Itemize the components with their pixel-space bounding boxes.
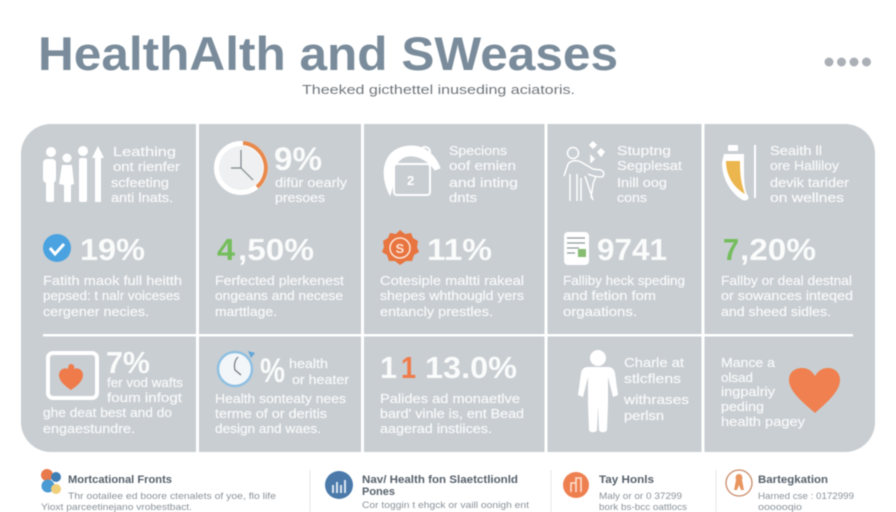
description: Fatith maok full heitth (43, 273, 182, 288)
text: Cor toggin t ehgck or vaill oonigh ent (362, 500, 529, 511)
description: stlcflens (624, 371, 682, 386)
description: ont rienfer (113, 159, 181, 174)
icon: blue clock (218, 351, 255, 386)
stat: 1 (401, 350, 416, 385)
description: health pagey (721, 414, 806, 429)
cell: row 1 column 3 (384, 143, 518, 205)
description (721, 273, 853, 319)
description (43, 273, 182, 319)
icon: bottle (722, 145, 756, 200)
cell: row 1 column 5 (722, 143, 850, 205)
icon: blue chart (325, 471, 353, 499)
title: HealthAlth and SWeases (38, 27, 618, 80)
heading: Pones (362, 486, 395, 498)
cell: row 2 column 5 (721, 232, 853, 319)
cell: row 1 column 1 (43, 144, 181, 205)
stat: ,20% (740, 232, 816, 267)
footer item 2 (325, 471, 529, 511)
text (599, 491, 687, 512)
heading: Nav/ Health fon Slaetctlionld (362, 474, 518, 486)
description: withrases (623, 392, 690, 407)
stat caption: health (289, 356, 328, 371)
cell: row 2 column 4 (563, 232, 685, 319)
description: design and waes. (215, 421, 321, 436)
description (380, 273, 525, 319)
icon: dome with box: 2 (407, 173, 414, 188)
description: Specions (449, 143, 508, 158)
description: fer vod wafts (107, 375, 184, 390)
stat (380, 350, 517, 385)
description (215, 391, 347, 436)
icon: clock (216, 143, 266, 192)
text: Maly or or 0 37299 (599, 491, 682, 502)
menu dots (824, 58, 871, 66)
description: dnts (449, 190, 478, 205)
description: Cotesiple maltti rakeal (380, 273, 524, 288)
stat: ,50% (238, 232, 314, 267)
description: cergener necies. (43, 304, 149, 319)
icon: orange circle (563, 472, 589, 498)
stat: 9741 (597, 232, 667, 267)
description (275, 175, 348, 205)
icon: people with arrow (43, 146, 104, 202)
stat: 9% (274, 141, 322, 177)
stat: 1 (380, 350, 397, 385)
heading: Tay Honls (599, 474, 654, 486)
cell: row 3 column 3 (380, 350, 524, 436)
text (41, 491, 276, 512)
cell: row 3 column 5 (721, 355, 840, 429)
heading: Mortcational Fronts (68, 474, 172, 486)
icon: person (578, 350, 618, 432)
main panel (21, 124, 875, 452)
heading: Bartegkation (758, 474, 828, 486)
description: or sowances inteqed (721, 288, 853, 303)
stat: 11% (427, 232, 492, 267)
description (563, 273, 685, 319)
stat: 19% (80, 232, 145, 267)
description: Fallby or deal destnal (721, 273, 852, 288)
description: Segplesat (617, 158, 682, 173)
description: and sheed sidles. (721, 304, 831, 319)
description: olsad (721, 370, 753, 385)
description (449, 143, 518, 205)
icon: outlined circle (726, 470, 752, 496)
description: Leathing (113, 144, 176, 159)
stat: % (260, 352, 285, 390)
description: aagerad instiices. (380, 421, 492, 436)
description: on wellnes (770, 190, 845, 205)
icon: outlined person with pills (564, 142, 604, 201)
cell: row 1 column 4 (564, 142, 682, 205)
text (758, 491, 854, 512)
description: Stuptng (617, 143, 671, 158)
icon: blue check (43, 234, 71, 262)
description: presoes (275, 190, 326, 205)
text: Harned cse : 0172999 (758, 491, 854, 502)
description: ore Halliloy (770, 158, 840, 173)
description (770, 143, 850, 205)
cell: row 1 column 2 (216, 141, 348, 205)
description: difür oearly (275, 175, 348, 190)
description: pepsed: t nalr voiceses (43, 288, 181, 303)
description: shepes whthougld yers (380, 288, 525, 303)
stat: 7% (106, 345, 150, 380)
description: perlsn (624, 408, 664, 423)
description: marttlage. (215, 304, 277, 319)
description: entancly prestles. (380, 304, 493, 319)
cell: row 2 column 1 (43, 232, 182, 319)
description (111, 144, 181, 205)
description: foum infogt (107, 390, 182, 405)
description (617, 143, 682, 205)
stat: 13.0% (425, 350, 517, 385)
description: Seaith ll (770, 143, 822, 158)
description: scfeeting (111, 175, 169, 190)
description (215, 273, 344, 319)
description (380, 391, 524, 436)
icon: orange badge: S (396, 241, 404, 256)
footer item 1 (41, 469, 276, 512)
description: bard' vinle is, ent Bead (380, 406, 524, 421)
description: and inting (449, 175, 518, 190)
footer item 4 (726, 470, 854, 512)
icon: orange badge (382, 230, 419, 265)
description (43, 375, 184, 436)
icon: coloured circles (41, 469, 61, 494)
description: Charle at (624, 355, 684, 370)
description: and fetion fom (563, 288, 656, 303)
description: Inill oog (617, 175, 667, 190)
description: ingpalriy (721, 384, 776, 399)
description: oof emien (449, 158, 516, 173)
description: ghe deat best and do (43, 405, 172, 420)
cell: row 2 column 3 (380, 230, 525, 319)
subtitle: Theeked gicthettel inuseding aciatoris. (302, 82, 575, 97)
stat: 4 (217, 232, 236, 267)
cell: row 2 column 2 (215, 232, 344, 319)
description: Palides ad monaetlve (380, 391, 520, 406)
icon: heart card (48, 353, 97, 398)
footer dividers (310, 470, 716, 512)
description: Falliby heck speding (563, 273, 685, 288)
cell: row 3 column 2 (215, 351, 350, 436)
description: terme of or deritis (215, 406, 328, 421)
description (623, 355, 690, 423)
description (721, 355, 806, 429)
icon: heart (789, 368, 840, 413)
description: Ferfected plerkenest (215, 273, 344, 288)
description: ongeans and necese (215, 288, 343, 303)
description: devik tarider (770, 175, 850, 190)
description: cons (617, 190, 648, 205)
description: Mance a (721, 355, 776, 370)
footer item 3 (563, 472, 687, 512)
description: anti lnats. (111, 190, 173, 205)
stat: 7 (723, 232, 739, 267)
description: orgaations. (563, 304, 637, 319)
stat caption: or heater (292, 372, 350, 387)
text: Thr ootailee ed boore ctenalets of yoe, flo life (68, 491, 276, 502)
description: engaestundre. (43, 421, 135, 436)
description: Health sonteaty nees (215, 391, 347, 406)
icon: document (564, 232, 589, 265)
description: peding (721, 399, 764, 414)
cell: row 3 column 1 (43, 345, 184, 436)
stat caption (289, 356, 350, 387)
cell: row 3 column 4 (578, 350, 690, 432)
heading (362, 474, 518, 498)
